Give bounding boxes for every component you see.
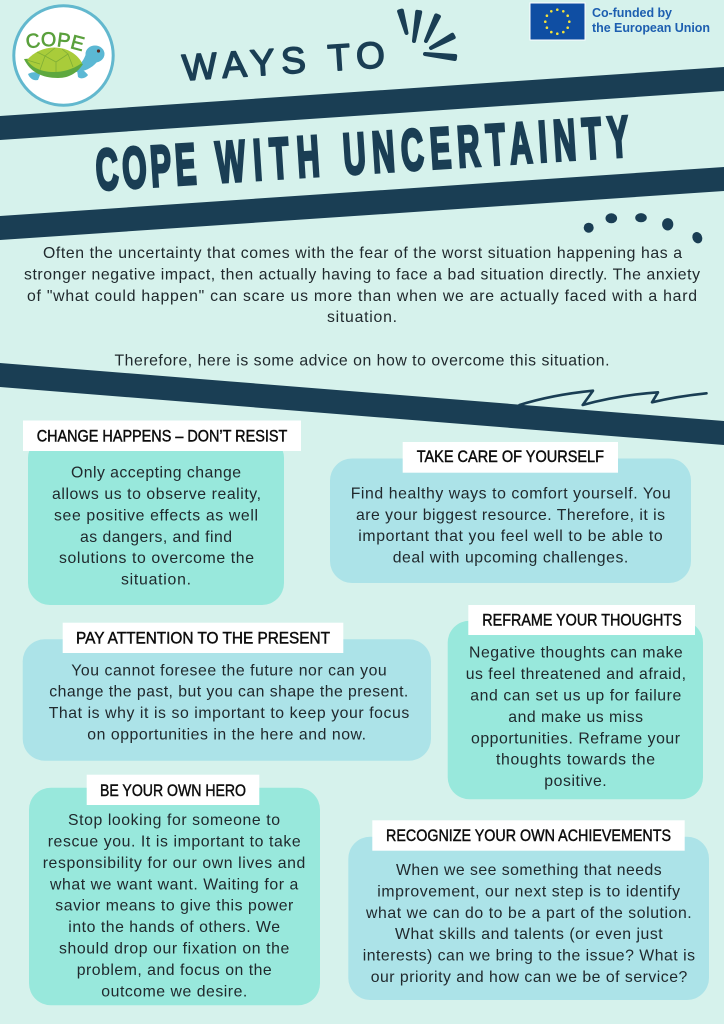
panel: reframe your thoughts [448, 605, 703, 799]
text: change happens: see positive effects as well [54, 507, 258, 524]
heading: be your own hero [87, 775, 259, 805]
text: pay attention to the present: You cannot foresee the future nor can you [71, 662, 387, 679]
intro text: Therefore, here is some advice on how to overcome this situation. [114, 352, 610, 369]
text: reframe your thoughts: and can set us up for failure [470, 688, 682, 704]
intro text: situation. [327, 309, 397, 326]
text: take care of yourself: are your biggest resource. Therefore, it is [356, 507, 665, 524]
heading: take care of yourself [403, 442, 618, 473]
text: be your own hero: should drop our fixation on the [59, 940, 290, 958]
text: pay attention to the present: change the past, but you can shape the present. [49, 684, 408, 701]
title band: bottom [0, 167, 724, 240]
text: take care of yourself: deal with upcoming challenges. [393, 550, 628, 567]
text: change happens: allows us to observe reality, [52, 486, 261, 503]
heading: recognize your own achievements [372, 820, 685, 851]
text: be your own hero: outcome we desire. [101, 984, 247, 1000]
text: recognize your own achievements: improvement, our next step is to identify [377, 883, 680, 900]
heading: pay attention to the present [63, 623, 343, 653]
panel: recognize your own achievements [348, 820, 709, 1000]
divider band [0, 363, 724, 445]
text: reframe your thoughts: positive. [544, 773, 607, 790]
text: be your own hero: what we want want. Waiting for a [49, 876, 299, 893]
heading: ways to: WAYS TO [181, 34, 386, 88]
title: cope with uncertainty: COPE [94, 131, 198, 202]
text: recognize your own achievements: What skills and talents (or even just [395, 926, 663, 943]
text: recognize your own achievements: our priority and how can we be of service? [371, 969, 688, 986]
text: reframe your thoughts: us feel threatened and afraid, [466, 666, 686, 683]
heading: reframe your thoughts: REFRAME YOUR THOUGHTS [482, 612, 682, 630]
panel: pay attention to the present [23, 623, 431, 761]
text: change happens: solutions to overcome the [59, 550, 254, 567]
title: cope with uncertainty: WITH [214, 124, 321, 195]
text: change happens: Only accepting change [71, 464, 241, 482]
text: be your own hero: responsibility for our own lives and [43, 855, 305, 872]
text: recognize your own achievements [363, 862, 695, 986]
text: be your own hero: into the hands of others. We [68, 919, 280, 936]
zigzag line [520, 391, 706, 405]
heading: take care of yourself: TAKE CARE OF YOURSELF [417, 448, 604, 466]
panel: take care of yourself [330, 442, 691, 583]
intro text: stronger negative impact, then actually having to face a bad situation directly. The anxiety [24, 266, 700, 283]
heading: be your own hero: BE YOUR OWN HERO [100, 782, 246, 800]
text: reframe your thoughts: thoughts towards the [496, 752, 655, 769]
title: cope with uncertainty: UNCERTAINTY [341, 104, 631, 187]
text: recognize your own achievements: When we see something that needs [396, 862, 662, 879]
text: change happens [52, 464, 261, 589]
text: pay attention to the present [49, 662, 409, 743]
text: take care of yourself [351, 485, 671, 567]
logo: COPE turtle [12, 4, 115, 107]
text: recognize your own achievements: interests) can we bring to the issue? What is [363, 948, 695, 965]
text: take care of yourself: important that you feel well to be able to [358, 528, 663, 545]
text: pay attention to the present: That is why it is so important to keep your focus [49, 705, 409, 722]
title band: top [0, 67, 724, 140]
text: reframe your thoughts: and make us miss [508, 709, 643, 726]
logo: EU co-funded: the European Union [592, 21, 710, 35]
text: be your own hero: problem, and focus on the [77, 962, 272, 979]
intro text: of "what could happen" can scare us more than when we are actually faced with a hard [27, 288, 697, 305]
text: reframe your thoughts: opportunities. Reframe your [471, 730, 680, 747]
text: reframe your thoughts [466, 645, 686, 790]
icon: dots [584, 213, 704, 245]
heading: reframe your thoughts [468, 605, 695, 635]
text: be your own hero [43, 812, 305, 1000]
heading: pay attention to the present: PAY ATTENTION TO THE PRESENT [76, 629, 330, 647]
panel: be your own hero [29, 775, 320, 1005]
heading: change happens: CHANGE HAPPENS – DON’T RESIST [37, 427, 287, 445]
logo: EU co-funded [530, 3, 710, 40]
title: cope with uncertainty [94, 104, 631, 202]
heading: change happens [23, 420, 301, 451]
panel: change happens [23, 420, 301, 605]
logo: EU co-funded: Co-funded by [592, 6, 672, 20]
text: be your own hero: rescue you. It is important to take [48, 834, 301, 850]
icon: spark strokes [399, 11, 455, 59]
text: be your own hero: savior means to give this power [55, 898, 293, 915]
text: change happens: situation. [121, 572, 191, 589]
text: be your own hero: Stop looking for someone to [68, 812, 280, 829]
text: take care of yourself: Find healthy ways to comfort yourself. You [351, 485, 671, 502]
text: reframe your thoughts: Negative thoughts can make [469, 645, 683, 662]
text: pay attention to the present: on opportunities in the here and now. [87, 726, 366, 743]
intro text [24, 245, 700, 369]
text: change happens: as dangers, and find [80, 529, 232, 546]
logo: COPE turtle: COPE [26, 32, 85, 52]
text: recognize your own achievements: what we can do to be a part of the solution. [365, 905, 692, 922]
heading: recognize your own achievements: RECOGNIZE YOUR OWN ACHIEVEMENTS [386, 827, 671, 845]
intro text: Often the uncertainty that comes with the fear of the worst situation happening has a [43, 245, 682, 262]
